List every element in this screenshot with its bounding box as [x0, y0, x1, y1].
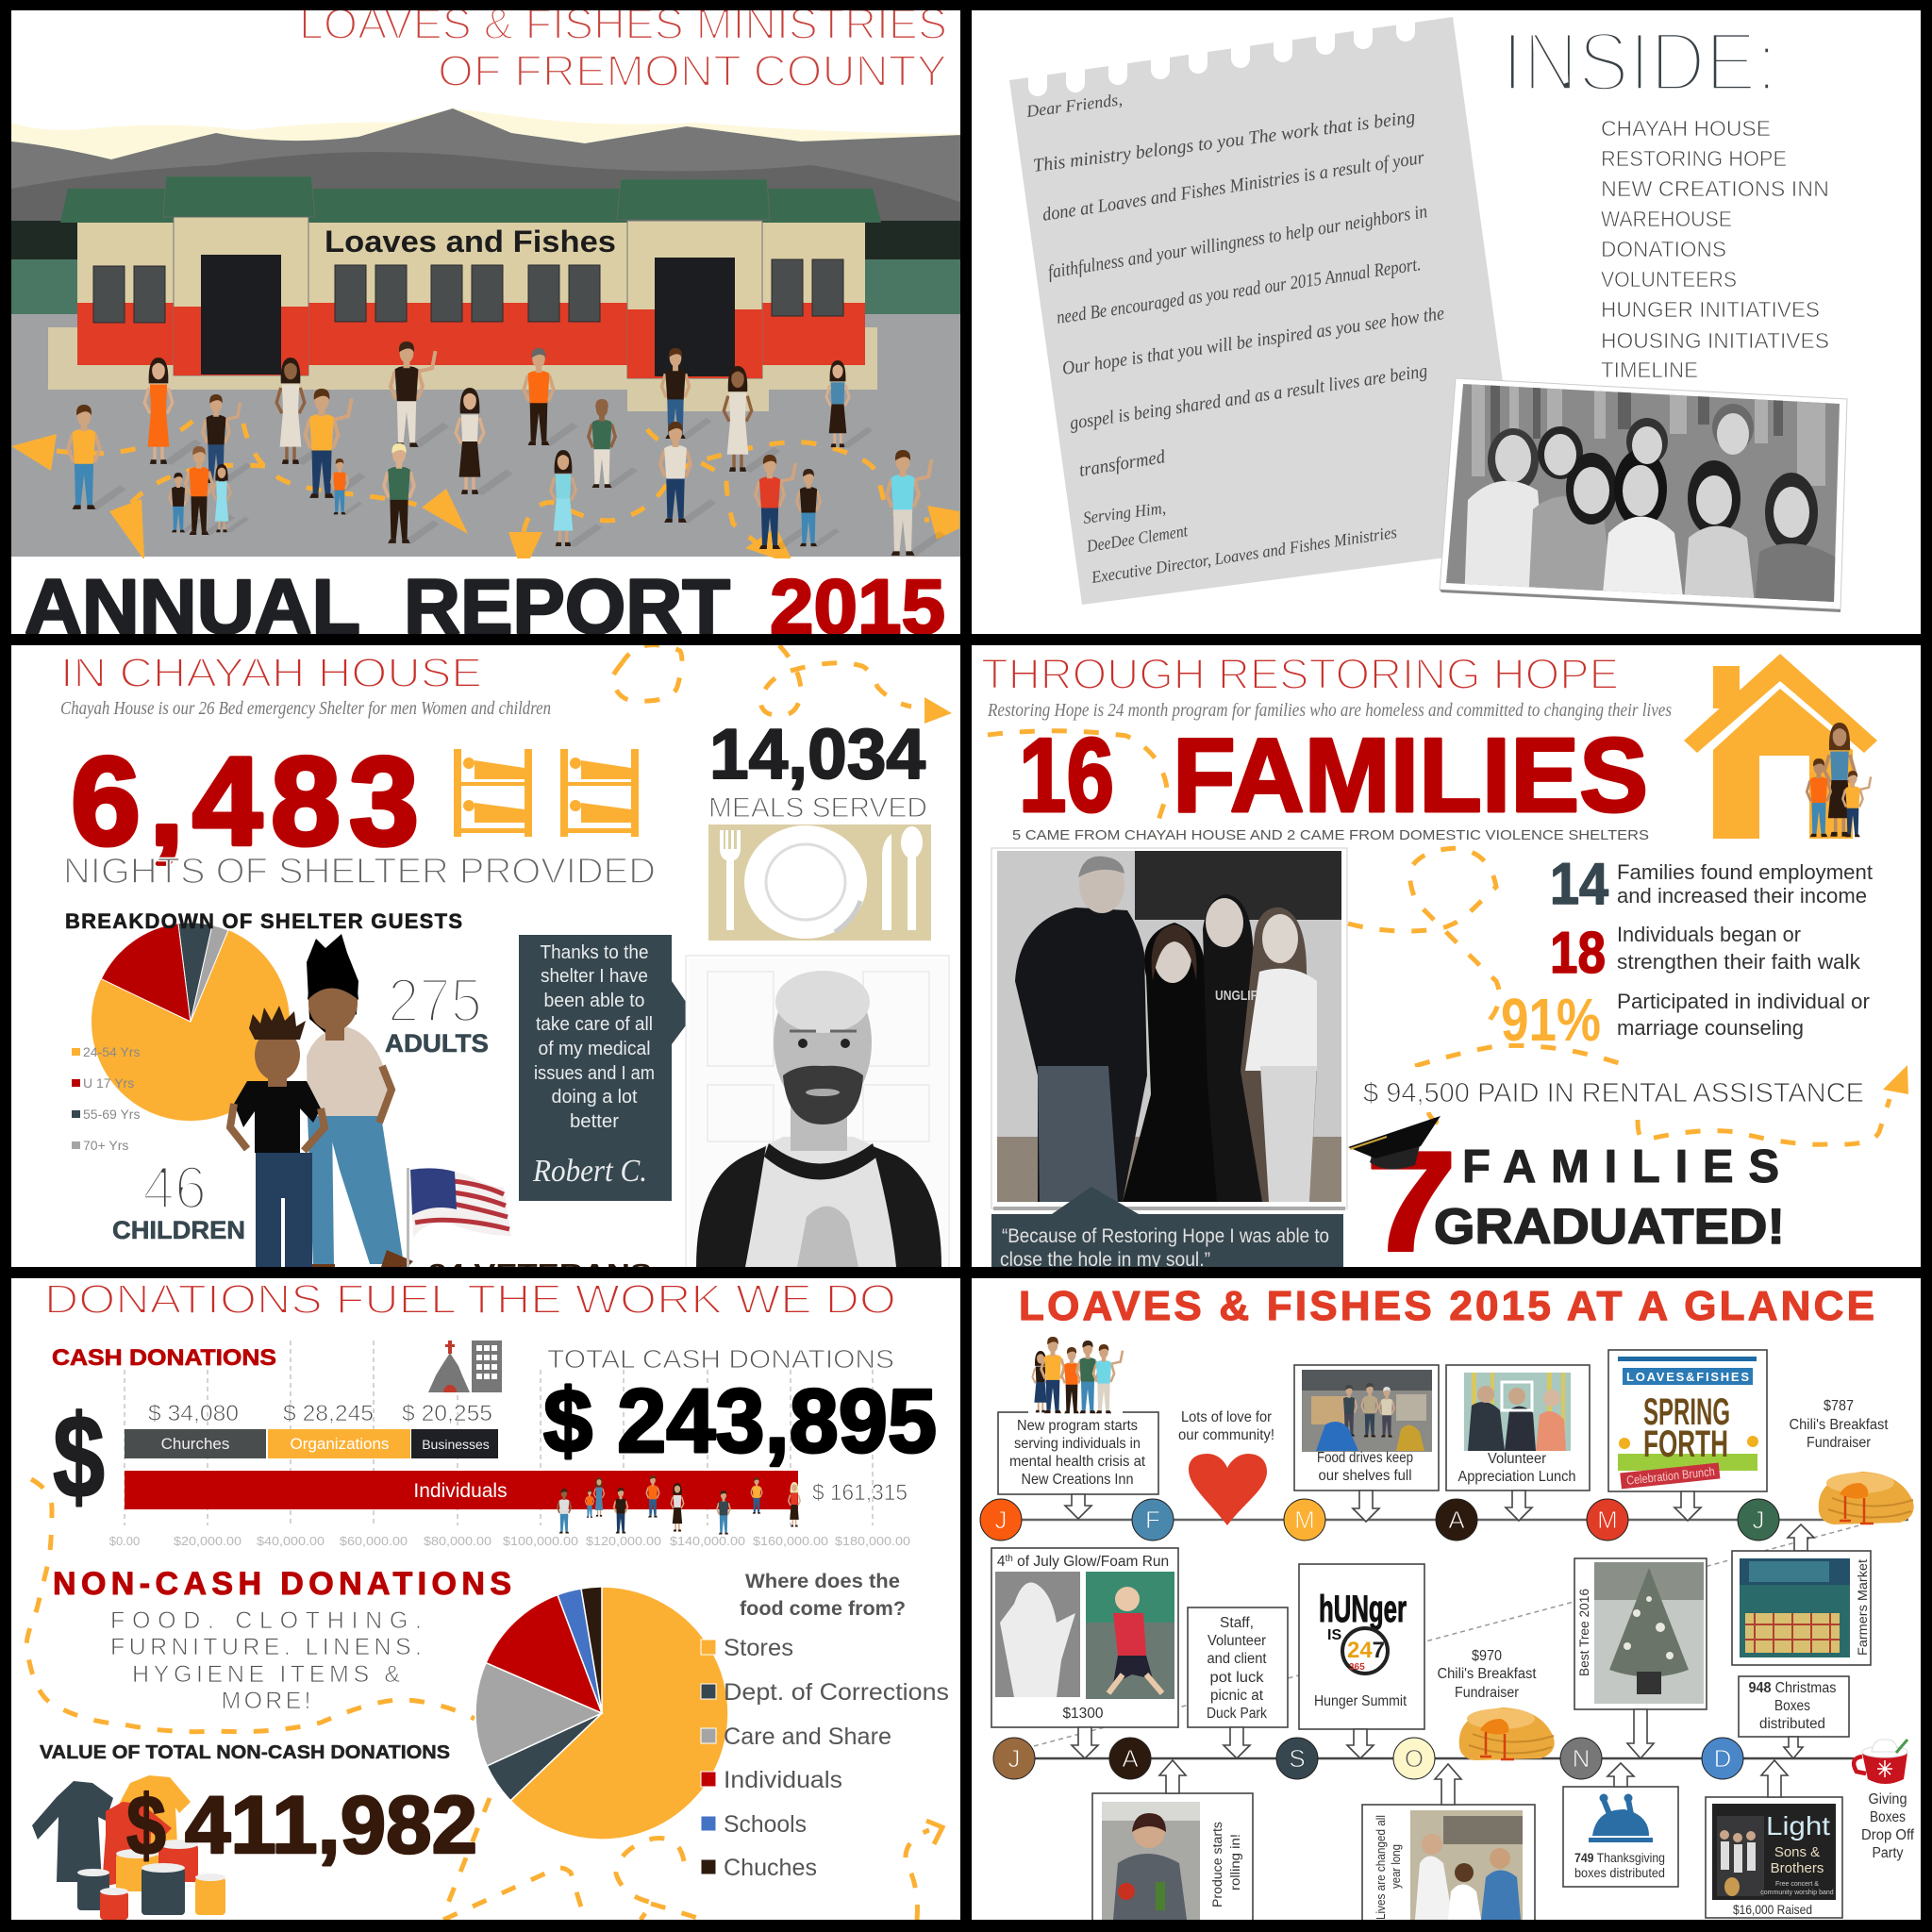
stat: nights of shelter: NIGHTS OF SHELTER PROVIDED	[63, 852, 656, 891]
chart: shelter guests pie	[92, 923, 290, 1121]
text: donation types: MORE!	[221, 1688, 311, 1714]
timeline: first half	[980, 1499, 1908, 1541]
timeline: first half: M	[1597, 1506, 1618, 1534]
note: $970 fundraiser: $970	[1472, 1648, 1502, 1664]
callout: food drives: our shelves full	[1319, 1468, 1411, 1484]
stat: families found employment	[1550, 852, 1873, 917]
text: donation types	[110, 1607, 422, 1714]
people crowd	[68, 341, 945, 557]
icon: five figures	[1028, 1337, 1132, 1414]
chart: cash donations: $ 28,245	[283, 1401, 374, 1426]
building	[48, 176, 881, 411]
icon: dollar sign: $	[53, 1391, 105, 1523]
callout: hunger summit: IS	[1327, 1627, 1341, 1643]
pie legend: Stores	[724, 1635, 793, 1661]
icon: pancakes second	[1459, 1707, 1555, 1760]
callout: produce: Produce starts	[1210, 1822, 1224, 1907]
callout: produce	[1092, 1760, 1253, 1925]
callout: spring forth	[1608, 1350, 1767, 1521]
letter paper: need Be encouraged as you read our 2015 Annual Report.	[1056, 254, 1423, 328]
callout: spring forth: Celebration Brunch	[1625, 1464, 1715, 1488]
contents list: RESTORING HOPE	[1601, 146, 1787, 171]
pie legend: Dept. of Corrections	[724, 1679, 949, 1706]
figure: adult and child	[230, 934, 413, 1272]
stat: meals served	[711, 727, 926, 817]
stat: rental assistance	[1358, 1067, 1877, 1112]
callout: thanksgiving boxes: 749 Thanksgiving	[1574, 1850, 1665, 1865]
contents list: TIMELINE	[1601, 358, 1698, 382]
timeline: first half: J	[1753, 1506, 1764, 1534]
contents list: WAREHOUSE	[1601, 207, 1732, 231]
dashed route: bottom with arrow	[443, 1798, 942, 1920]
callout: family quote	[991, 1187, 1343, 1271]
timeline: first half: A	[1448, 1506, 1465, 1534]
pie legend: Care and Share	[724, 1724, 891, 1750]
pie legend: 70+ Yrs	[83, 1138, 128, 1153]
callout: glow run	[991, 1548, 1178, 1758]
callout: food drives: Food drives keep	[1317, 1450, 1413, 1466]
stat: counseling: Participated in individual or	[1617, 990, 1870, 1013]
heading: breakdown: BREAKDOWN OF SHELTER GUESTS	[65, 909, 462, 933]
icon: pancakes	[1819, 1472, 1914, 1524]
letter paper: DeeDee Clement	[1085, 521, 1190, 556]
chart: cash donations: $140,000.00	[670, 1534, 745, 1548]
heading: where does the food come from	[740, 1571, 906, 1620]
photo: family: UNGLIF	[1215, 988, 1257, 1004]
chart: cash donations: Organizations	[291, 1435, 389, 1453]
dashed route: middle	[1348, 848, 1499, 1034]
callout: family quote: close the hole in my soul.”	[1000, 1249, 1210, 1271]
heading: value of non-cash: VALUE OF TOTAL NON-CASH DONATIONS	[40, 1742, 450, 1763]
letter paper: transformed	[1077, 446, 1167, 481]
panel: donations	[11, 1276, 960, 1920]
callout: light concert: community worship band	[1760, 1890, 1834, 1896]
contents list: DONATIONS	[1601, 237, 1726, 261]
chart: cash donations: $ 34,080	[148, 1401, 239, 1426]
contents list: CHAYAH HOUSE	[1601, 116, 1771, 141]
timeline: first half: F	[1145, 1506, 1160, 1534]
stat: faith walk	[1550, 921, 1861, 986]
callout: thanksgiving boxes	[1563, 1763, 1678, 1887]
title: ministry name: LOAVES & FISHES MINISTRIES	[299, 0, 947, 48]
callout: hunger summit: 247	[1347, 1638, 1385, 1663]
callout: produce: rolling in!	[1228, 1834, 1242, 1890]
note: giving boxes: Party	[1872, 1845, 1904, 1861]
note: $970 fundraiser	[1438, 1648, 1537, 1701]
callout: farmers market: Farmers Market	[1856, 1559, 1870, 1656]
building: Loaves and Fishes	[325, 225, 616, 258]
panel: timeline	[972, 1278, 1921, 1927]
heading: annual report 2015	[25, 558, 944, 634]
team photo	[1440, 377, 1849, 612]
stat: total cash donations: TOTAL CASH DONATIONS	[547, 1344, 894, 1374]
callout: farmers market	[1732, 1524, 1871, 1665]
callout: glow run: th	[1005, 1554, 1013, 1564]
stat: 16 families: 16	[1019, 717, 1114, 834]
callout: glow run: of July Glow/Foam Run	[1013, 1554, 1169, 1570]
heading: annual report 2015: REPORT	[404, 564, 730, 650]
chart: cash donations: $160,000.00	[753, 1534, 828, 1548]
dashed route: upper	[988, 731, 1167, 835]
callout: thanksgiving boxes: boxes distributed	[1574, 1865, 1665, 1880]
note: giving boxes	[1861, 1791, 1915, 1861]
callout: robert quote: shelter I have	[541, 966, 648, 987]
photo: robert	[686, 956, 949, 1272]
stat: families found employment: 14	[1550, 852, 1608, 917]
pie legend	[72, 1044, 140, 1153]
stat: adults: ADULTS	[385, 1029, 489, 1058]
icon: house with family	[1684, 654, 1886, 839]
stat: families found employment: Families found employment	[1617, 860, 1873, 884]
stat: 7 families graduated: 7	[1365, 1122, 1457, 1282]
stat: children: 46	[142, 1154, 207, 1222]
stat: children	[113, 1168, 243, 1240]
timeline: second half: S	[1289, 1744, 1306, 1773]
heading: THROUGH RESTORING HOPE	[981, 650, 1619, 698]
pie legend: Individuals	[724, 1767, 842, 1793]
callout: staff picnic: pot luck	[1209, 1670, 1264, 1686]
letter paper: Dear Friends,	[1024, 90, 1124, 121]
panel: cover	[11, 0, 962, 650]
callout: robert quote: take care of all	[536, 1014, 653, 1035]
chart: cash donations: $120,000.00	[586, 1534, 661, 1548]
note: giving boxes: Boxes	[1870, 1809, 1906, 1825]
letter paper: Executive Director, Loaves and Fishes Ministries	[1090, 523, 1398, 587]
note: love for community with heart	[1178, 1409, 1274, 1525]
text: donation types: FURNITURE. LINENS.	[110, 1634, 422, 1660]
dashed route: left loop	[26, 1479, 475, 1732]
callout: staff picnic: and client	[1208, 1651, 1267, 1667]
contents list: HOUSING INITIATIVES	[1601, 328, 1829, 353]
letter paper: Serving Him,	[1082, 498, 1167, 527]
callout: christmas boxes: Boxes	[1774, 1698, 1810, 1714]
callout: light concert: Brothers	[1771, 1860, 1824, 1876]
chart: cash donations: $ 161,315	[812, 1480, 908, 1506]
timeline: second half	[993, 1738, 1854, 1779]
timeline: second half: D	[1714, 1744, 1731, 1773]
stat: faith walk: strengthen their faith walk	[1617, 950, 1861, 974]
stat: meals served: 14,034	[709, 714, 925, 793]
callout: light concert: Sons &	[1774, 1844, 1820, 1860]
stat: children: CHILDREN	[112, 1216, 245, 1244]
icon: plate and cutlery	[708, 824, 931, 941]
stat: 16 families: 5 CAME FROM CHAYAH HOUSE AND 2 CAME FROM DOMESTIC VIOLENCE SHELTERS	[1012, 827, 1649, 843]
callout: robert quote: better	[570, 1111, 619, 1132]
pie legend	[701, 1635, 949, 1881]
callout: family quote: “Because of Restoring Hope I was able to	[1002, 1225, 1329, 1247]
icon: church and building	[428, 1341, 502, 1392]
stat: faith walk: Individuals began or	[1617, 923, 1801, 946]
timeline: second half: N	[1573, 1744, 1590, 1773]
contents list: VOLUNTEERS	[1601, 267, 1737, 291]
stat: nights of shelter	[67, 755, 653, 883]
callout: new program	[998, 1412, 1158, 1519]
stat: counseling: marriage counseling	[1617, 1016, 1804, 1040]
note: love for community with heart: our community!	[1178, 1427, 1274, 1443]
callout: staff picnic: Staff,	[1220, 1615, 1254, 1631]
chart: cash donations: Businesses	[422, 1437, 490, 1452]
note: $787 fundraiser: Fundraiser	[1807, 1435, 1871, 1451]
heading: DONATIONS FUEL THE WORK WE DO	[44, 1276, 896, 1323]
letter paper: done at Loaves and Fishes Ministries is a result of your	[1041, 147, 1425, 225]
panel: restoring hope	[972, 645, 1921, 1282]
dashed route and arrows	[11, 419, 959, 558]
callout: christmas boxes: distributed	[1759, 1716, 1825, 1732]
text: donation types: HYGIENE ITEMS &	[132, 1661, 400, 1688]
stat: faith walk: 18	[1550, 921, 1606, 986]
timeline: second half: J	[1008, 1744, 1021, 1773]
chart: cash donations: $100,000.00	[503, 1534, 578, 1548]
panel: chayah house	[11, 645, 960, 1287]
callout: robert quote: issues and I am	[534, 1063, 655, 1084]
pie legend: Chuches	[724, 1855, 817, 1881]
letter paper: Our hope is that you will be inspired as you see how the	[1061, 303, 1446, 379]
stat: total non-cash value: $	[126, 1779, 166, 1874]
callout: robert quote: been able to	[543, 991, 645, 1011]
icon: american flag	[407, 1168, 511, 1267]
dashed route	[612, 645, 952, 724]
stat: rental assistance: $ 94,500 PAID IN RENTAL ASSISTANCE	[1363, 1078, 1864, 1108]
letter paper: gospel is being shared and as a result lives are being	[1069, 360, 1429, 434]
heading: inside: INSIDE:	[1502, 14, 1777, 108]
mountains	[11, 108, 962, 557]
timeline: second half: O	[1405, 1744, 1424, 1773]
callout: best tree	[1574, 1558, 1707, 1758]
heading: LOAVES & FISHES 2015 AT A GLANCE	[1019, 1283, 1874, 1329]
callout: light concert: Free concert &	[1775, 1881, 1819, 1888]
stat: 7 families graduated: FAMILIES	[1462, 1141, 1779, 1192]
callout: lives changed: Lives are changed all	[1374, 1815, 1388, 1920]
icon: bunk beds	[454, 749, 639, 837]
chart: cash donations: Churches	[161, 1435, 229, 1453]
stat: counseling: 91%	[1501, 986, 1601, 1054]
chart: cash donations: $40,000.00	[257, 1534, 325, 1548]
title: ministry name: OF FREMONT COUNTY	[438, 46, 947, 95]
callout: volunteer lunch	[1446, 1365, 1590, 1521]
chart: cash donations: $0.00	[109, 1534, 140, 1548]
callout: glow run: 4	[997, 1554, 1005, 1570]
callout: robert quote: Thanks to the	[540, 942, 649, 963]
note: love for community with heart: Lots of love for	[1181, 1409, 1272, 1425]
chart: cash donations: $ 20,255	[402, 1401, 492, 1426]
chart: food source pie	[475, 1587, 728, 1840]
callout: volunteer lunch: Volunteer	[1488, 1451, 1546, 1467]
contents list	[1601, 116, 1829, 382]
subheading: Chayah House is our 26 Bed emergency Shelter for men Women and children	[60, 698, 551, 719]
stat: adults: 275	[388, 965, 482, 1035]
callout: food drives	[1294, 1365, 1439, 1522]
icon: graduation cap	[1348, 1116, 1441, 1169]
callout: light concert: Light	[1766, 1811, 1830, 1840]
heading: non-cash donations: NON-CASH DONATIONS	[53, 1566, 511, 1602]
pie legend: 55-69 Yrs	[83, 1107, 140, 1122]
icon: shirts and paint cans	[32, 1775, 225, 1920]
stat: 7 families graduated	[1365, 1122, 1785, 1282]
heading: where does the food come from: food come from?	[740, 1598, 906, 1620]
chart: cash donations	[109, 1341, 910, 1548]
mini people on bar	[558, 1475, 812, 1535]
pie legend: 24-54 Yrs	[83, 1044, 140, 1059]
callout: staff picnic	[1188, 1607, 1288, 1758]
timeline: second half: A	[1122, 1744, 1139, 1773]
heading: cash donations: CASH DONATIONS	[52, 1345, 276, 1371]
callout: light concert: $16,000 Raised	[1733, 1902, 1812, 1917]
callout: hunger summit: hUNger	[1319, 1589, 1407, 1630]
stat: counseling	[1501, 986, 1870, 1054]
callout: hunger summit: 365	[1349, 1662, 1365, 1673]
letter paper: faithfulness and your willingness to help our neighbors in	[1046, 201, 1429, 283]
callout: robert quote: of my medical	[538, 1039, 651, 1059]
photo: family	[991, 848, 1347, 1210]
note: $970 fundraiser: Fundraiser	[1455, 1685, 1519, 1701]
callout: new program: mental health crisis at	[1009, 1454, 1146, 1470]
chart: cash donations: $20,000.00	[174, 1534, 242, 1548]
timeline: first half: J	[994, 1506, 1008, 1534]
label: veterans (cropped): 34 VETERANS	[428, 1258, 652, 1287]
note: giving boxes: Giving	[1868, 1791, 1907, 1807]
stat: total cash donations: $ 243,895	[543, 1371, 937, 1472]
note: $970 fundraiser: Chili's Breakfast	[1438, 1666, 1537, 1682]
callout: glow run: $1300	[1062, 1706, 1104, 1722]
stat: 16 families	[1013, 736, 1649, 840]
thin diagonal connector	[1034, 1525, 1859, 1746]
timeline: first half: M	[1294, 1506, 1315, 1534]
callout: new program: New Creations Inn	[1021, 1472, 1134, 1488]
callout: robert quote	[519, 935, 694, 1201]
stat: 7 families graduated: GRADUATED!	[1434, 1199, 1785, 1255]
note: $787 fundraiser: Chili's Breakfast	[1789, 1417, 1889, 1433]
chart: cash donations: $80,000.00	[424, 1534, 491, 1548]
contents list: NEW CREATIONS INN	[1601, 176, 1829, 201]
callout: best tree: Best Tree 2016	[1577, 1589, 1591, 1676]
heading: annual report 2015: 2015	[770, 564, 945, 650]
panel: letter and contents	[972, 10, 1921, 634]
callout: new program: New program starts	[1017, 1418, 1138, 1434]
callout: new program: serving individuals in	[1014, 1436, 1141, 1452]
callout: staff picnic: Duck Park	[1207, 1706, 1267, 1722]
callout: volunteer lunch: Appreciation Lunch	[1458, 1469, 1575, 1485]
heading: annual report 2015: ANNUAL	[25, 564, 360, 650]
pie legend: U 17 Yrs	[83, 1075, 134, 1091]
dashed route: lower with arrow	[1415, 1045, 1908, 1144]
stat: meals served: MEALS SERVED	[708, 792, 927, 824]
callout: lives changed	[1362, 1764, 1535, 1927]
heading: where does the food come from: Where does the	[745, 1571, 900, 1592]
note: $787 fundraiser: $787	[1824, 1398, 1854, 1414]
stat: adults	[385, 979, 489, 1053]
contents list: HUNGER INITIATIVES	[1601, 297, 1820, 322]
title: ministry name	[304, 10, 944, 85]
note: $787 fundraiser	[1789, 1398, 1889, 1451]
chart: cash donations: Individuals	[413, 1480, 508, 1502]
pie legend: Schools	[724, 1811, 807, 1838]
letter paper	[1009, 13, 1525, 605]
callout: hunger summit: Hunger Summit	[1314, 1693, 1407, 1709]
stat: nights of shelter: 6,483	[71, 732, 419, 872]
callout: christmas boxes: 948 Christmas	[1749, 1680, 1837, 1696]
callout: staff picnic: Volunteer	[1208, 1633, 1266, 1649]
callout: spring forth: FORTH	[1643, 1424, 1728, 1465]
callout: robert quote: doing a lot	[551, 1087, 638, 1108]
callout: staff picnic: picnic at	[1210, 1688, 1264, 1704]
subheading: Restoring Hope is 24 month program for families who are homeless and committed to changing their lives	[987, 700, 1672, 721]
callout: hunger summit	[1299, 1564, 1424, 1758]
heading: IN CHAYAH HOUSE	[60, 650, 482, 696]
letter paper: This ministry belongs to you The work that is being	[1032, 107, 1416, 176]
callout: spring forth: SPRING	[1643, 1391, 1730, 1433]
callout: robert quote: Robert C.	[532, 1154, 647, 1189]
text: donation types: FOOD. CLOTHING.	[110, 1607, 422, 1634]
chart: cash donations: $180,000.00	[835, 1534, 910, 1548]
callout: light concert	[1706, 1760, 1842, 1918]
callout: christmas boxes	[1739, 1676, 1849, 1758]
callout: spring forth: LOAVES&FISHES	[1626, 1370, 1749, 1384]
callout: lives changed: year long	[1390, 1844, 1403, 1889]
stat: families found employment: and increased their income	[1617, 884, 1867, 908]
stat: total non-cash value: 411,982	[185, 1780, 477, 1871]
stat: 16 families: FAMILIES	[1173, 717, 1648, 834]
note: giving boxes: Drop Off	[1861, 1827, 1915, 1843]
icon: cocoa mug	[1854, 1740, 1907, 1784]
chart: cash donations: $60,000.00	[340, 1534, 408, 1548]
